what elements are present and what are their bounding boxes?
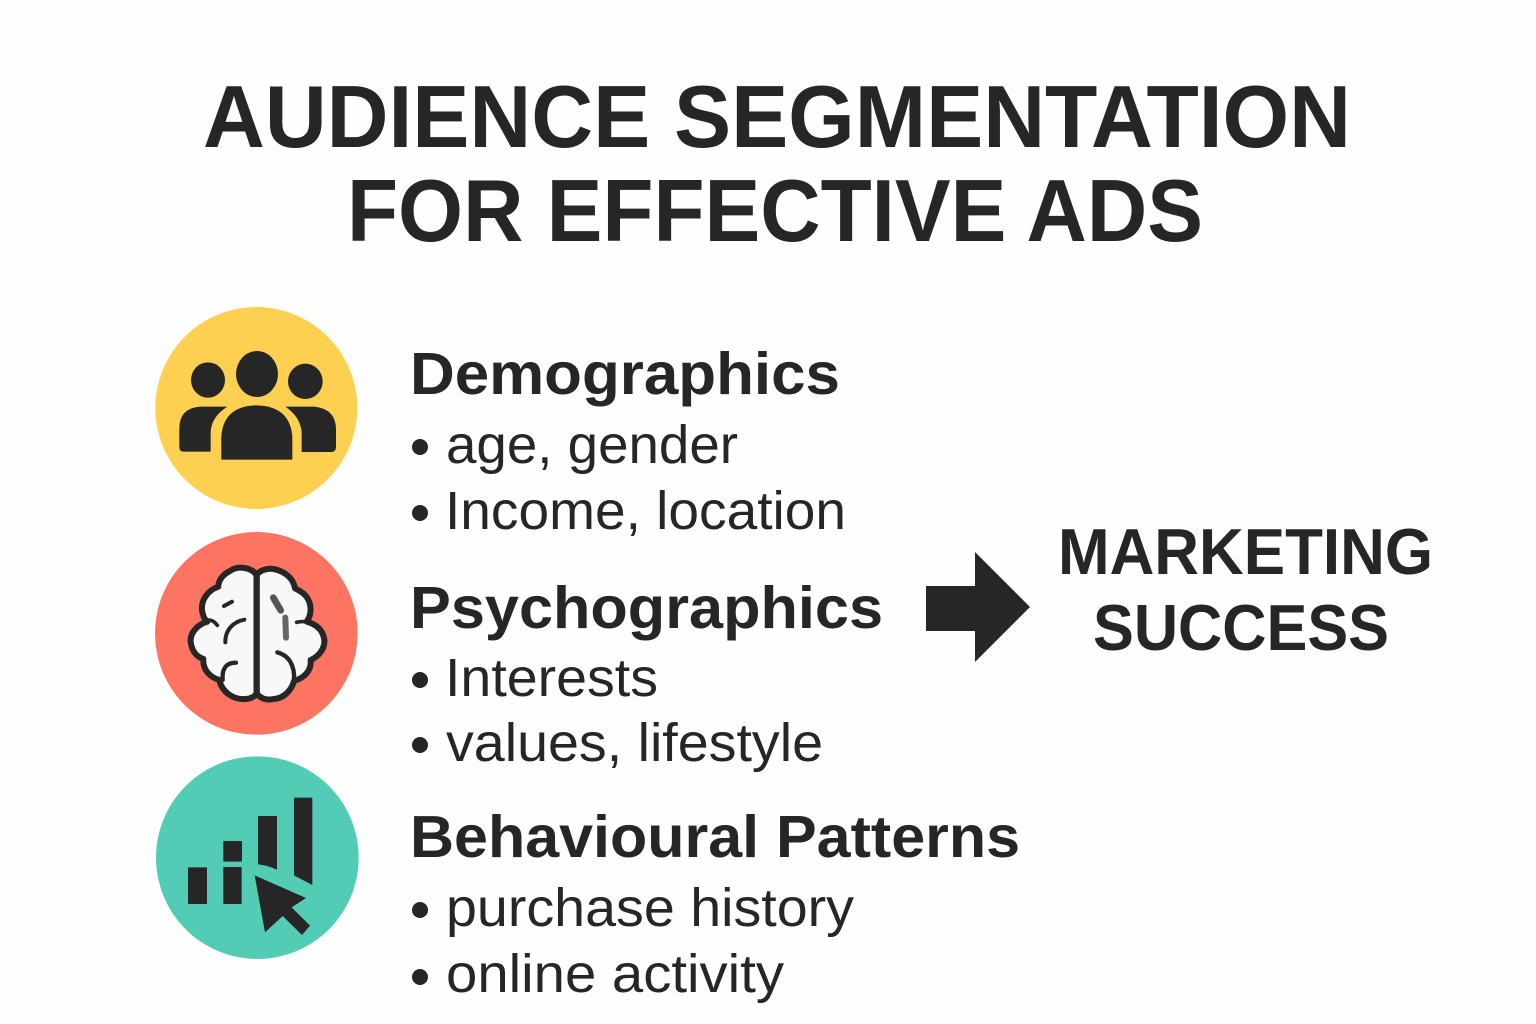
icon: behavioural chart and cursor bbox=[156, 756, 359, 959]
text block: behavioural patterns: purchase history bbox=[446, 878, 854, 938]
text block: behavioural patterns: online activity bbox=[446, 944, 784, 1004]
text block: psychographics: Interests bbox=[445, 648, 658, 708]
outcome label: marketing success: MARKETING bbox=[1058, 515, 1433, 588]
text block: demographics bbox=[410, 341, 846, 541]
title: FOR EFFECTIVE ADS bbox=[347, 161, 1203, 260]
text block: psychographics: values, lifestyle bbox=[446, 713, 823, 773]
text block: behavioural patterns bbox=[410, 804, 1020, 1004]
icon: demographics people bbox=[155, 307, 357, 509]
title bbox=[203, 67, 1351, 260]
title: AUDIENCE SEGMENTATION bbox=[203, 67, 1351, 166]
text block: demographics: age, gender bbox=[446, 415, 738, 475]
arrow bbox=[926, 552, 1030, 662]
text block: psychographics bbox=[410, 575, 883, 773]
text block: demographics: Income, location bbox=[445, 481, 846, 541]
text block: demographics: Demographics bbox=[410, 341, 840, 407]
outcome label: marketing success bbox=[1058, 515, 1433, 664]
text block: behavioural patterns: Behavioural Patterns bbox=[410, 804, 1020, 870]
text block: psychographics: Psychographics bbox=[410, 575, 883, 641]
outcome label: marketing success: SUCCESS bbox=[1093, 591, 1389, 664]
icon: psychographics brain bbox=[155, 532, 358, 735]
